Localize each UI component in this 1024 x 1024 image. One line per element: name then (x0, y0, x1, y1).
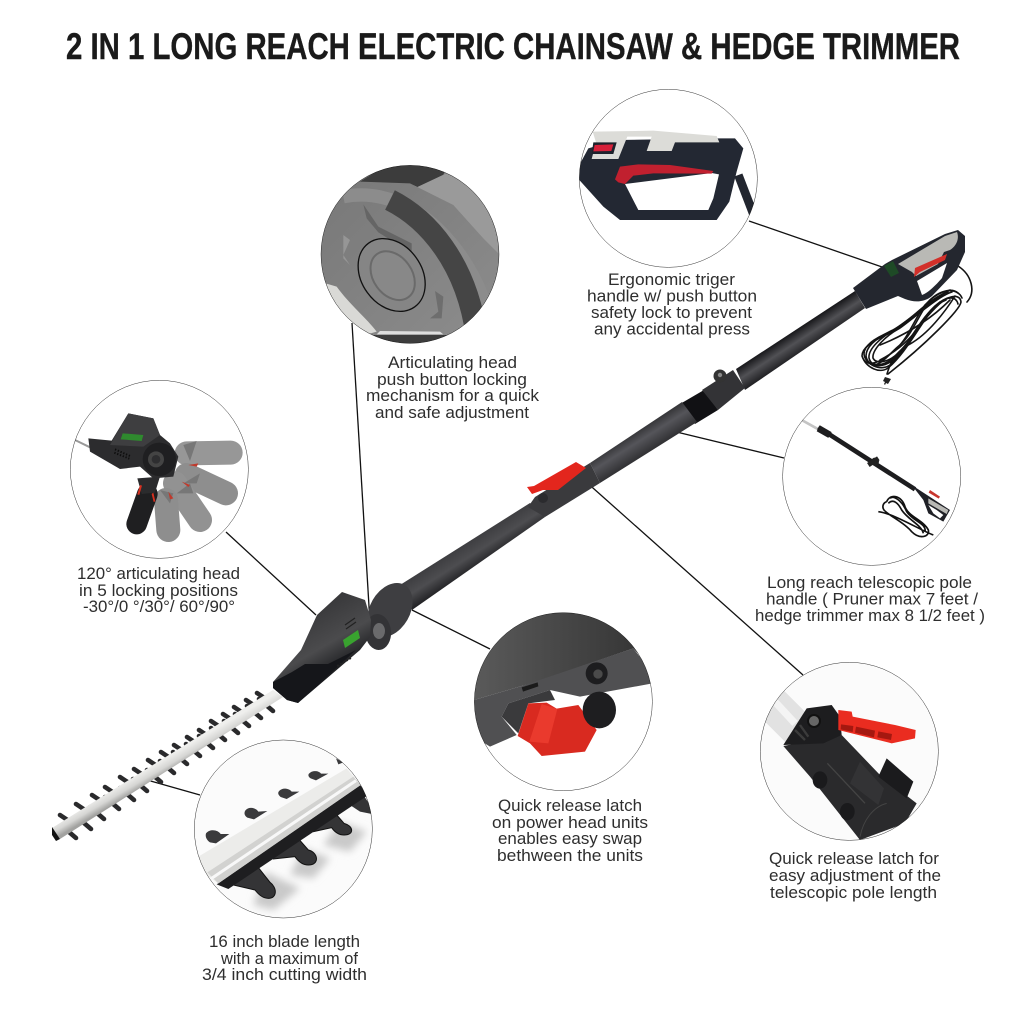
product: pole hedge trimmer (52, 230, 972, 841)
safety button (593, 144, 613, 151)
screw (586, 662, 608, 684)
head joint (358, 575, 422, 651)
red trigger (615, 164, 713, 184)
callout: telescopic pole photo (783, 387, 961, 565)
text: 120 degree head: -30°/0 °/30°/ 60°/90° (83, 597, 235, 616)
pivot disc (143, 443, 176, 476)
text: articulating head button: and safe adjustment (375, 403, 529, 422)
lower tube (400, 503, 545, 610)
text: telescopic pole: handle ( Pruner max 7 feet / (766, 590, 978, 608)
text: power head latch: bethween the units (497, 846, 643, 865)
text: blade length (202, 932, 367, 984)
raised grooves (363, 204, 412, 253)
callout: power head latch photo (474, 613, 653, 791)
blade teeth (60, 693, 273, 838)
silver bar (197, 768, 361, 883)
text: blade length: with a maximum of (220, 949, 358, 968)
lower clamp (528, 463, 600, 517)
teeth shadows (253, 822, 367, 910)
text: articulating head button: push button locking (377, 370, 527, 389)
leader lines (140, 221, 885, 795)
text: 120 degree head (77, 564, 240, 616)
text: pole latch: telescopic pole length (770, 883, 937, 902)
motor housing (273, 592, 371, 703)
text: articulating head button (366, 353, 539, 422)
handle body (579, 138, 743, 220)
blade bar (52, 690, 283, 839)
text: ergonomic handle: safety lock to prevent (591, 303, 752, 322)
plug (883, 377, 891, 385)
text: power head latch: Quick release latch (498, 796, 642, 815)
text: pole latch: Quick release latch for (769, 849, 939, 868)
tube body (783, 735, 917, 840)
housing strip (474, 648, 653, 747)
callout: pole latch photo (760, 662, 938, 841)
text: ergonomic handle (587, 270, 757, 338)
text: power head latch: on power head units (492, 813, 648, 832)
text: telescopic pole: Long reach telescopic pole (767, 573, 972, 592)
text: ergonomic handle: any accidental press (594, 319, 750, 338)
grip tube (590, 402, 697, 483)
red latch on pole (527, 462, 586, 494)
red latch (518, 703, 597, 756)
upper housing (360, 165, 447, 187)
callout: handle photo (579, 89, 757, 267)
text: ergonomic handle: handle w/ push button (587, 287, 757, 306)
text: telescopic pole (755, 573, 985, 625)
mini cord (878, 496, 933, 537)
lower teeth (234, 868, 276, 899)
text: blade length: 16 inch blade length (209, 932, 360, 951)
black inner tube (680, 390, 718, 424)
grey cover (592, 131, 719, 159)
callout: push button photo (320, 165, 500, 345)
text: power head latch (492, 796, 648, 865)
black handle (137, 494, 147, 524)
telescopic collar (702, 370, 745, 410)
text: articulating head button: Articulating head (388, 353, 517, 372)
upper telescopic tube (736, 291, 865, 390)
text: blade length: 3/4 inch cutting width (202, 965, 367, 984)
lower left light area (326, 284, 376, 334)
housing upper (474, 613, 653, 700)
ghost handle positions (166, 453, 231, 530)
red lever (838, 710, 916, 743)
push button (358, 238, 426, 312)
text: 120 degree head: in 5 locking positions (79, 581, 238, 600)
text: 120 degree head: 120° articulating head (77, 564, 240, 583)
guide knobs (813, 771, 827, 789)
motor body (88, 413, 178, 478)
text: ergonomic handle: Ergonomic triger (608, 270, 735, 289)
black blade strip (217, 785, 368, 889)
mini tool (802, 420, 818, 429)
text: pole latch (769, 849, 941, 902)
knob (583, 692, 616, 728)
handle (853, 230, 965, 309)
callout: blade photo (194, 740, 377, 918)
text: telescopic pole: hedge trimmer max 8 1/2 feet ) (755, 606, 985, 625)
brackets (850, 762, 884, 805)
text: power head latch: enables easy swap (498, 829, 642, 848)
cable (738, 175, 755, 218)
upper teeth (206, 830, 229, 843)
text: articulating head button: mechanism for a quick (366, 386, 539, 405)
text: pole latch: easy adjustment of the (769, 866, 941, 885)
callout: articulating positions photo (70, 380, 248, 558)
power cord coil (862, 266, 972, 374)
silver tube (766, 691, 804, 742)
dark rim band (343, 188, 488, 302)
